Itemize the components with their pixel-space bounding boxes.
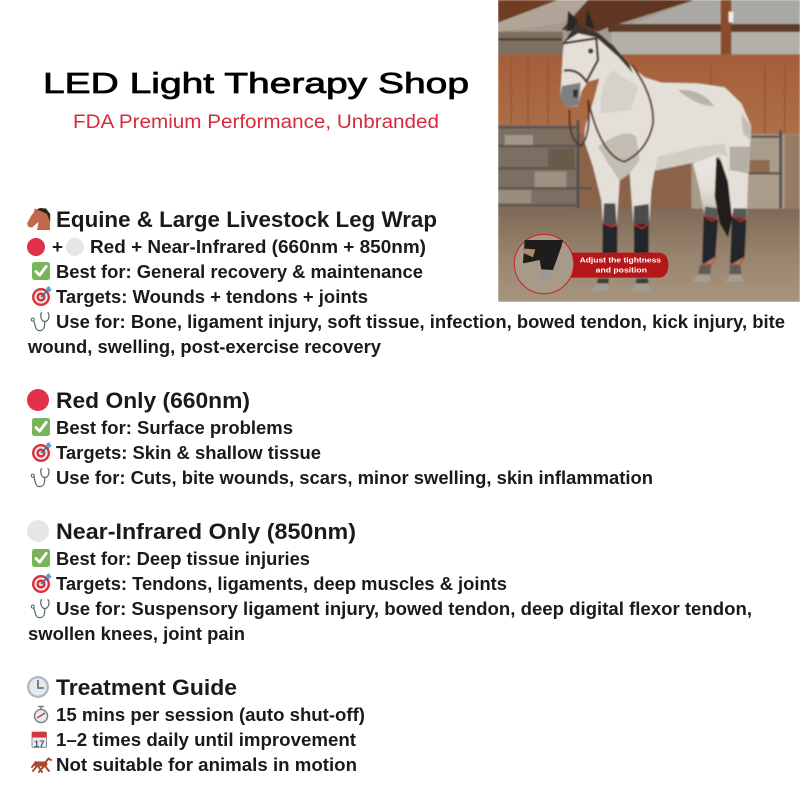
heading: Red Only (660nm) [56,388,250,413]
callout badge: adjust the tightness: and position [596,266,647,275]
horse body [560,30,751,225]
shaded coat [655,143,728,171]
eye [588,48,593,54]
tail [715,157,733,237]
muzzle [560,83,581,107]
use for row: Use for: Suspensory ligament injury, bowed tendon, deep digital flexor tendon, [56,599,752,619]
title: LED Light Therapy Shop [43,68,469,100]
section: equine and large livestock leg wrap [27,207,785,357]
best for row: Best for: General recovery & maintenance [56,262,423,282]
use for row [28,599,752,644]
icon: light grey circle [27,520,49,542]
photo: horse wearing leg wraps [498,0,800,302]
icon: horse head [27,208,50,230]
targets row: Targets: Tendons, ligaments, deep muscles & joints [56,574,507,594]
frequency row: 17 [34,739,44,750]
callout badge: adjust the tightness: Adjust the tightness [580,256,661,265]
far hind leg [693,153,719,218]
subtitle: FDA Premium Performance, Unbranded [73,112,439,133]
use for row: Use for: Bone, ligament injury, soft tissue, infection, bowed tendon, kick injury, bite [56,312,785,332]
use for row: wound, swelling, post-exercise recovery [27,337,381,357]
frequency row: 1–2 times daily until improvement [56,730,356,750]
use for row: Use for: Cuts, bite wounds, scars, minor swelling, skin inflammation [56,468,653,488]
use for row [27,312,785,357]
targets row: Targets: Skin & shallow tissue [56,443,321,463]
session length row: 15 mins per session (auto shut-off) [56,705,365,725]
icon: clock [27,676,49,698]
heading: Treatment Guide [56,675,237,700]
best for row: Best for: Deep tissue injuries [56,549,310,569]
heading: Near-Infrared Only (850nm) [56,519,356,544]
tack [563,38,598,82]
section: red only [27,388,653,488]
icon: red circle [27,389,49,411]
wraps [602,223,617,253]
heading: Equine & Large Livestock Leg Wrap [56,207,437,232]
best for row: Best for: Surface problems [56,418,293,438]
ears and mane [567,11,578,32]
section: near-infrared only [27,519,752,644]
dark socks [603,203,617,225]
targets row: Targets: Wounds + tendons + joints [56,287,368,307]
light types row: + [52,237,63,257]
callout badge: adjust the tightness [514,234,668,294]
use for row: swollen knees, joint pain [28,624,245,644]
motion warning row: Not suitable for animals in motion [56,755,357,775]
hooves [597,278,649,284]
light types row: Red + Near-Infrared (660nm + 850nm) [90,237,426,257]
section: treatment guide [27,675,365,775]
